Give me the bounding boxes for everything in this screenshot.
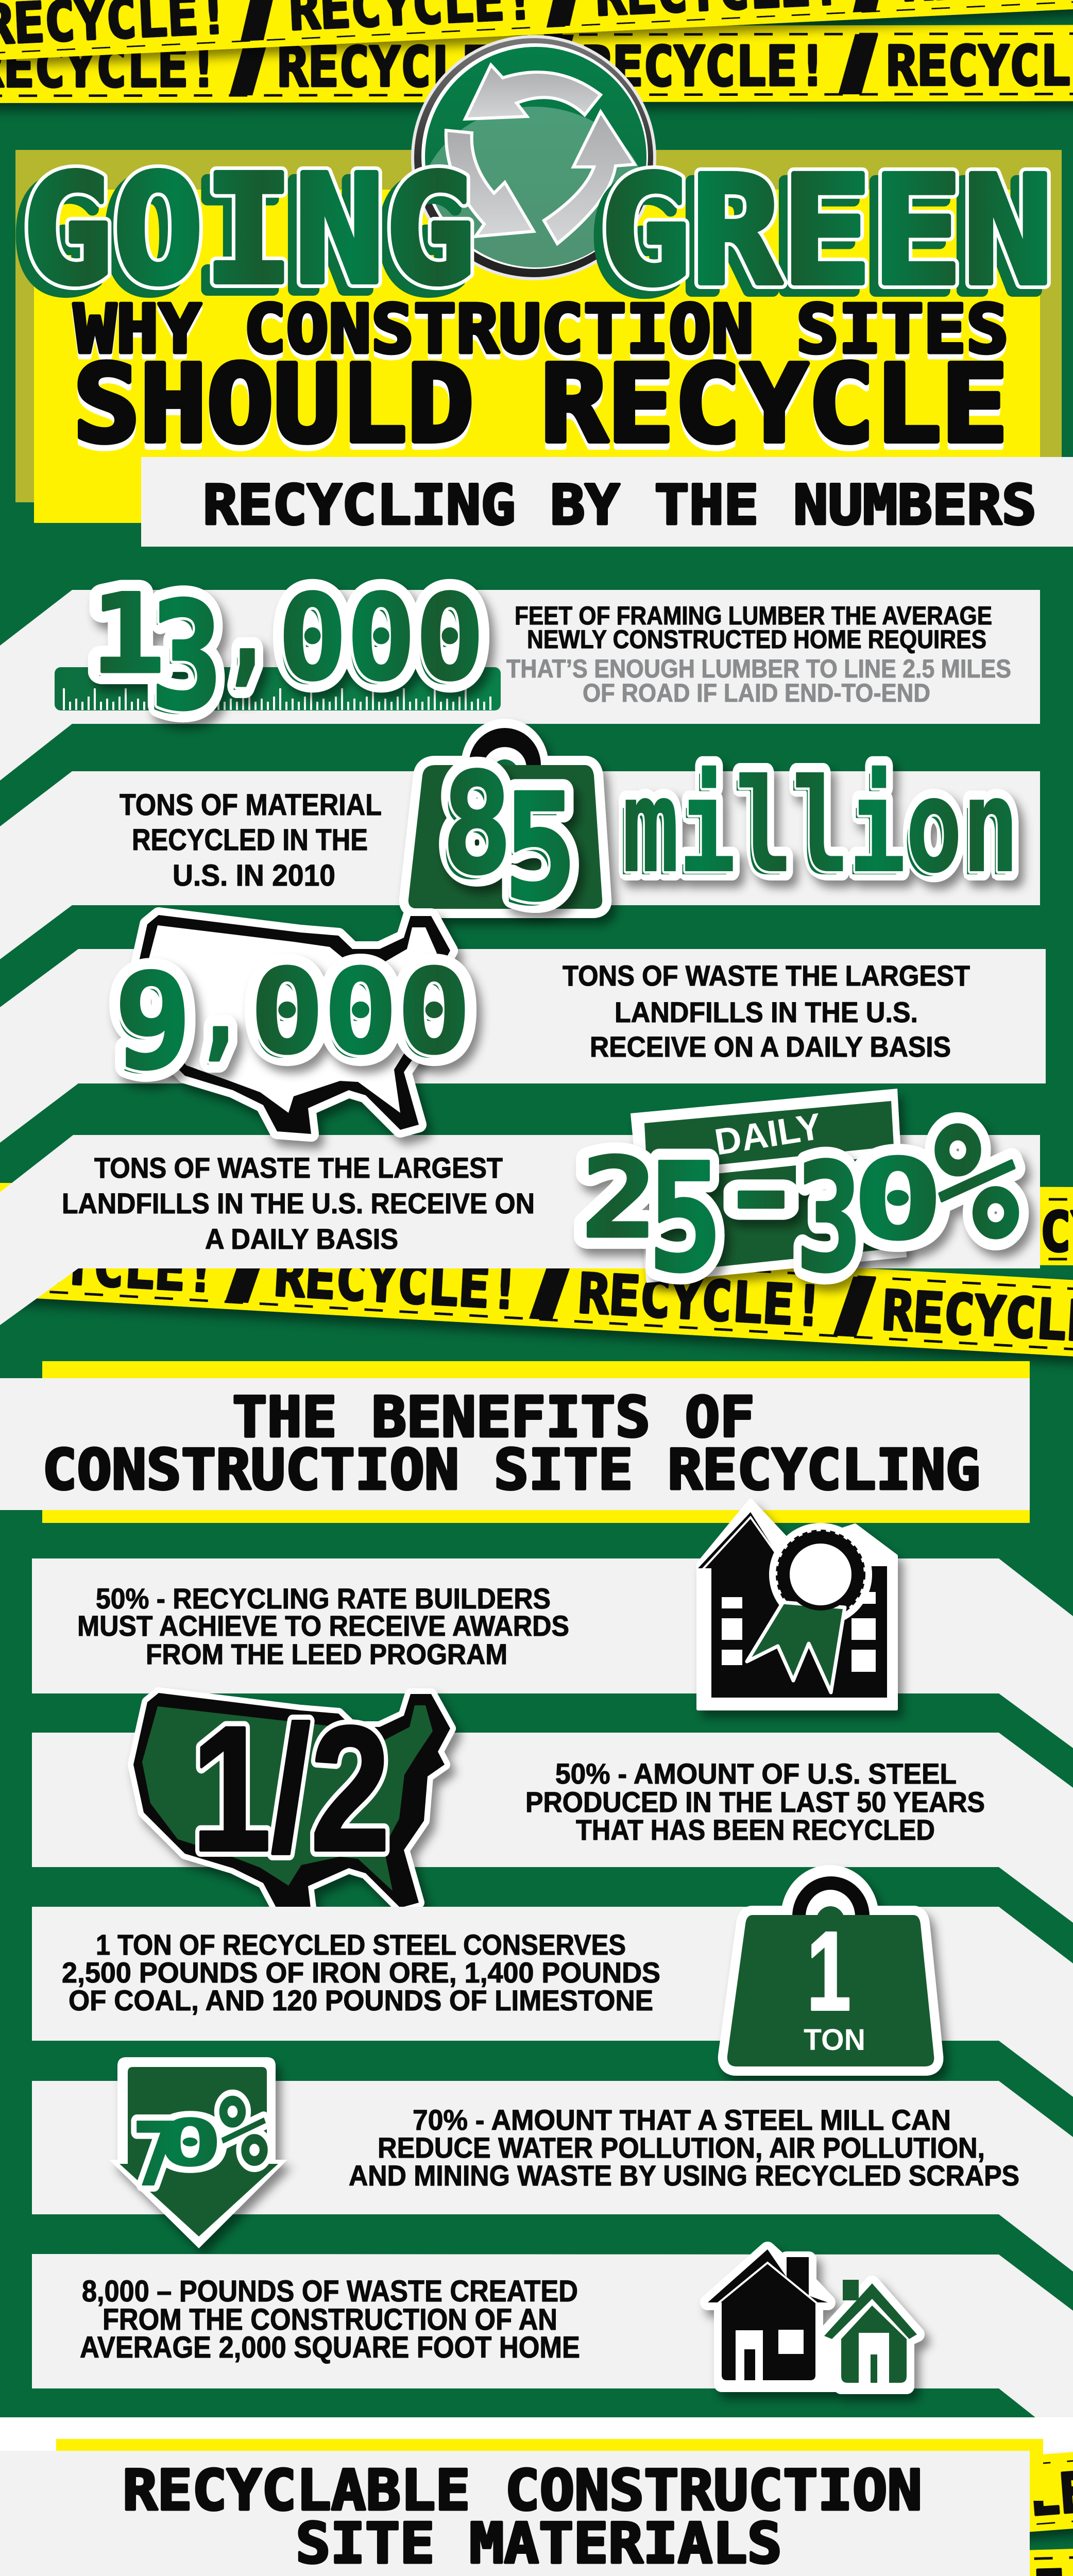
number: 13,000: 1 <box>91 570 165 698</box>
icon: down arrow with 70%: % <box>218 2074 268 2189</box>
yellow title panel <box>34 190 1040 523</box>
icon: map with 9,000: 000 <box>250 945 471 1080</box>
number: 85: 8 <box>442 743 512 905</box>
number: 25-30%: - <box>719 1129 804 1258</box>
olive backing panel <box>15 150 1062 502</box>
panel: construction waste <box>32 2254 1073 2447</box>
number: 25-30%: 2 <box>581 1134 657 1263</box>
number: 13,000: , <box>222 565 273 697</box>
panel: 85 million tons: U.S. IN 2010 <box>173 859 335 892</box>
panel: 9,000 tons of waste <box>0 949 1046 1143</box>
title: Going Green: GOING <box>22 143 475 317</box>
icon: map with 9,000: 9 <box>114 945 192 1098</box>
icon: U.S. map with one half: 1/2 <box>192 1690 390 1888</box>
number: 13,000: 3 <box>150 570 223 743</box>
number: 25-30% <box>581 1088 1020 1306</box>
icon: down arrow with 70% <box>109 2057 287 2248</box>
number: 25-30%: 0 <box>853 1136 943 1264</box>
number: 85: 8 <box>442 743 512 905</box>
icon: down arrow with 70%: 7 <box>132 2104 179 2206</box>
section heading: materials: RECYCLABLE CONSTRUCTION <box>123 2459 922 2523</box>
panel: 13,000 feet of lumber: OF ROAD IF LAID END-TO-END <box>583 679 930 707</box>
number: 13,000: , <box>216 571 268 703</box>
section heading: materials <box>0 2451 1030 2576</box>
number: 13,000: 3 <box>145 577 217 749</box>
title: Going Green: GOING <box>13 150 467 325</box>
panel: construction waste: AVERAGE 2,000 SQUARE FOOT HOME <box>80 2331 580 2364</box>
subtitle: Should recycle: SHOULD RECYCLE <box>73 342 1008 466</box>
panel: LEED awards: MUST ACHIEVE TO RECEIVE AWARDS <box>77 1609 569 1642</box>
panel: 25-30% daily: A DAILY BASIS <box>205 1223 398 1255</box>
panel: steel conservation <box>32 1907 1073 2097</box>
panel: 25-30% daily: LANDFILLS IN THE U.S. RECEIVE ON <box>62 1187 535 1219</box>
panel: U.S. steel <box>32 1733 1073 1923</box>
number: 85 <box>437 743 577 941</box>
number: 25-30%: 0 <box>853 1136 943 1264</box>
icon: daily calendar sign <box>631 1089 907 1283</box>
number: 13,000: 000 <box>278 569 484 706</box>
icon: map with 9,000: , <box>190 957 242 1077</box>
number: 13,000: 000 <box>278 569 484 706</box>
caution tape: middle: RECYCLE! <box>272 1245 522 1321</box>
icon: map with 9,000 <box>110 915 471 1134</box>
icon: daily calendar sign: DAILY <box>712 1106 824 1163</box>
icon: one ton weight <box>727 1865 934 2066</box>
number: 13,000: 000 <box>278 569 484 706</box>
number: 25-30%: 3 <box>796 1132 862 1306</box>
icon: map with 9,000: 000 <box>246 951 466 1086</box>
number: 85: 8 <box>437 750 507 912</box>
number: 13,000: 000 <box>273 575 479 713</box>
title: Going Green: GOING <box>22 143 475 317</box>
section heading: recycling by the numbers <box>141 457 1073 547</box>
icon: map with 9,000: 9 <box>114 945 192 1098</box>
icon: map with 9,000: 9 <box>110 952 187 1105</box>
caution tape: header lower <box>0 25 1073 103</box>
title: Going Green: GREEN <box>591 151 1045 326</box>
section heading: materials: SITE MATERIALS <box>296 2512 782 2576</box>
panel: 13,000 feet of lumber: THAT’S ENOUGH LUMBER TO LINE 2.5 MILES <box>506 654 1011 683</box>
number: 25-30%: 3 <box>796 1132 862 1306</box>
number: 13,000: 3 <box>150 570 223 743</box>
caution tape: header upper <box>0 0 1073 62</box>
panel: U.S. steel: PRODUCED IN THE LAST 50 YEARS <box>525 1786 985 1818</box>
icon: map with 9,000: , <box>195 951 246 1071</box>
icon: building with ribbon <box>698 1500 896 1709</box>
icon: weight bag <box>408 719 602 909</box>
panel: 85 million tons: TONS OF MATERIAL <box>120 788 382 822</box>
panel: LEED awards <box>32 1558 1073 1748</box>
icon: one ton weight: 1 <box>807 1909 851 2034</box>
number: 25-30%: - <box>719 1129 804 1258</box>
yellow backing: benefits heading <box>42 1361 1030 1523</box>
number: 85: 5 <box>504 762 577 934</box>
caution tape: header lower: RECYCLE! <box>277 35 523 99</box>
panel: U.S. steel: THAT HAS BEEN RECYCLED <box>576 1814 935 1846</box>
icon: U.S. map with one half <box>133 1690 450 1912</box>
icon: U.S. map with one half: 1/2 <box>192 1690 390 1888</box>
caution tape: middle: RECYCLE! <box>576 1262 826 1338</box>
icon: map with 9,000: , <box>195 951 246 1071</box>
number: 85: 5 <box>504 762 577 934</box>
icon: down arrow with 70%: 0 <box>158 2106 223 2181</box>
panel: LEED awards: 50% - RECYCLING RATE BUILDERS <box>96 1582 551 1615</box>
panel: construction waste: FROM THE CONSTRUCTION OF AN <box>103 2303 557 2336</box>
number: 25-30%: % <box>933 1088 1020 1277</box>
panel: steel mill: REDUCE WATER POLLUTION, AIR POLLUTION, <box>378 2131 985 2164</box>
subtitle: Why construction sites: WHY CONSTRUCTION SITES <box>74 290 1009 368</box>
number: 13,000: 1 <box>91 570 165 698</box>
number: 13,000: 1 <box>91 570 165 698</box>
caution tape: behind daily panel <box>0 1183 1073 1266</box>
panel: 13,000 feet of lumber <box>0 590 1040 781</box>
section heading: recycling by the numbers: RECYCLING BY THE NUMBERS <box>203 473 1036 537</box>
section heading: benefits <box>0 1378 1030 1510</box>
caution tape: header lower: RECYCLE! <box>582 35 828 98</box>
caution tape: bottom lower <box>0 2546 1073 2576</box>
panel: 85 million tons: RECYCLED IN THE <box>132 823 368 857</box>
icon: down arrow with 70%: 7 <box>132 2104 179 2206</box>
number: 13,000: , <box>222 565 273 697</box>
number: 25-30%: % <box>933 1088 1020 1277</box>
panel: steel conservation: OF COAL, AND 120 POUNDS OF LIMESTONE <box>69 1984 653 2016</box>
panel: 9,000 tons of waste: TONS OF WASTE THE LARGEST <box>563 959 970 992</box>
number: 13,000: 3 <box>150 570 223 743</box>
panel: steel mill: AND MINING WASTE BY USING RECYCLED SCRAPS <box>349 2159 1019 2192</box>
number: 13,000: , <box>222 565 273 697</box>
yellow backing: materials heading <box>56 2439 1043 2501</box>
panel: 9,000 tons of waste: LANDFILLS IN THE U.S. <box>615 996 918 1028</box>
number: 85: 5 <box>499 770 572 941</box>
number: 25-30%: 5 <box>648 1132 723 1306</box>
number: 13,000: 1 <box>86 577 160 704</box>
icon: houses <box>708 2249 917 2386</box>
number: 25-30%: 5 <box>648 1132 723 1306</box>
icon: one ton weight: TON <box>804 2023 865 2057</box>
panel: LEED awards: FROM THE LEED PROGRAM <box>146 1638 507 1670</box>
icon: down arrow with 70%: % <box>218 2074 268 2189</box>
section heading: benefits: THE BENEFITS OF <box>232 1385 755 1450</box>
number: 85: 5 <box>504 762 577 934</box>
number: 85: 8 <box>442 743 512 905</box>
title: Going Green <box>13 143 1053 326</box>
title: Going Green: GREEN <box>600 144 1053 318</box>
panel: steel mill: 70% - AMOUNT THAT A STEEL MILL CAN <box>413 2104 951 2136</box>
white band <box>0 2417 1073 2571</box>
panel: 25-30% daily: TONS OF WASTE THE LARGEST <box>94 1151 503 1184</box>
section heading: benefits: CONSTRUCTION SITE RECYCLING <box>42 1438 980 1502</box>
subtitle: Should recycle: SHOULD RECYCLE <box>73 348 1008 472</box>
panel: steel mill <box>32 2081 1073 2272</box>
caution tape: bottom upper <box>0 2444 1073 2576</box>
panel: construction waste: 8,000 – POUNDS OF WASTE CREATED <box>82 2275 578 2308</box>
icon: ruler <box>55 667 501 710</box>
panel: 13,000 feet of lumber: FEET OF FRAMING LUMBER THE AVERAGE <box>515 601 992 630</box>
title: Going Green: GREEN <box>600 144 1053 318</box>
panel: U.S. steel: 50% - AMOUNT OF U.S. STEEL <box>555 1757 957 1790</box>
panel: 13,000 feet of lumber: NEWLY CONSTRUCTED HOME REQUIRES <box>527 625 986 654</box>
icon: map with 9,000: 9 <box>114 945 192 1098</box>
caution tape: bottom upper: RECYCLE! <box>569 2481 820 2563</box>
icon: map with 9,000: 000 <box>250 945 471 1080</box>
icon: recycling badge <box>411 35 656 280</box>
icon: map with 9,000: , <box>195 951 246 1071</box>
number: 25-30%: 2 <box>581 1134 657 1263</box>
subtitle: Why construction sites: WHY CONSTRUCTION SITES <box>74 295 1009 374</box>
icon: map with 9,000: 000 <box>250 945 471 1080</box>
panel: 85 million tons <box>0 771 1040 959</box>
caution tape: middle <box>0 1217 1073 1362</box>
panel: 9,000 tons of waste: RECEIVE ON A DAILY BASIS <box>590 1030 951 1063</box>
icon: down arrow with 70%: 0 <box>158 2106 223 2181</box>
panel: 25-30% daily <box>0 1135 1040 1325</box>
number: 13,000 <box>86 565 484 749</box>
panel: steel conservation: 2,500 POUNDS OF IRON ORE, 1,400 POUNDS <box>62 1956 660 1989</box>
panel: steel conservation: 1 TON OF RECYCLED STEEL CONSERVES <box>96 1928 626 1961</box>
